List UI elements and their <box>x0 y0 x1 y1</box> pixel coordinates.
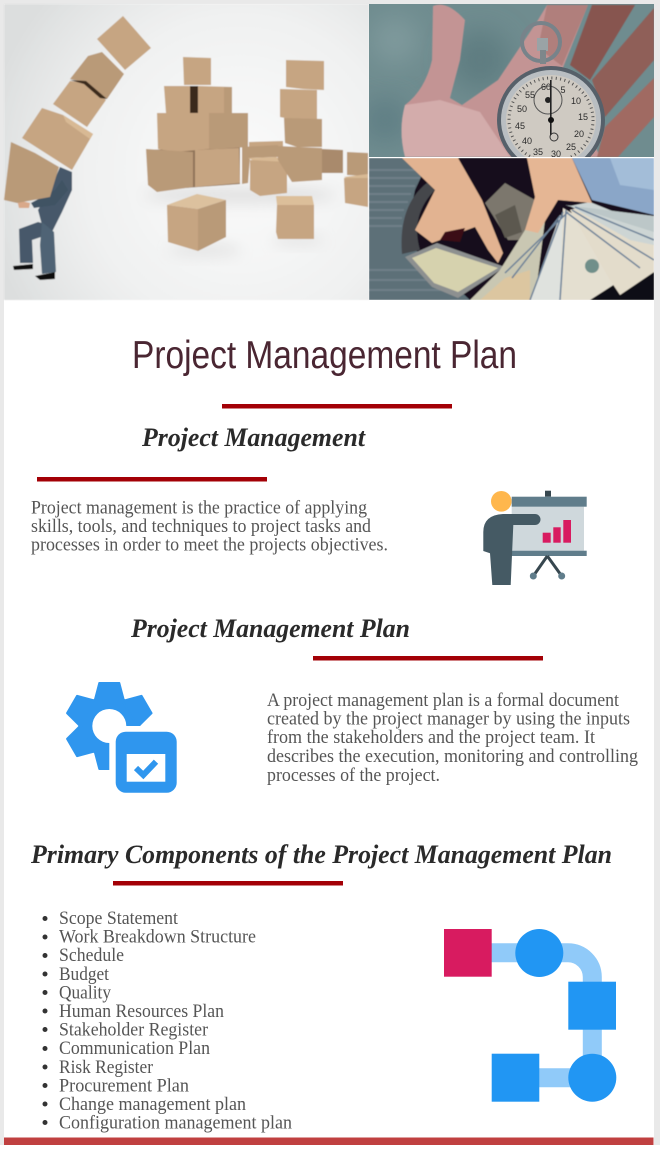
bulleted list of components: Stakeholder Register <box>59 1021 208 1041</box>
denim right <box>572 158 654 215</box>
icon: gear with calendar check <box>65 683 181 800</box>
stopwatch: 45 <box>515 121 525 131</box>
icon: process flow diagram <box>444 929 616 1102</box>
bulleted list of components: Scope Statement <box>59 909 179 929</box>
stopwatch: 60 <box>541 82 551 92</box>
stopwatch: 5 <box>560 85 566 95</box>
bulleted list of components: Human Resources Plan <box>59 1002 224 1022</box>
hands <box>402 158 503 263</box>
bills <box>485 183 535 240</box>
denim left <box>369 158 470 300</box>
bulleted list of components: Communication Plan <box>59 1039 210 1059</box>
photo: man carrying boxes and stacked boxes <box>4 4 369 300</box>
bulleted list of components: Budget <box>59 965 110 985</box>
stopwatch: 55 <box>525 90 535 100</box>
text block: project management plan definition: created by the project manager by using the inputs <box>267 710 630 730</box>
stopwatch: 15 <box>578 112 588 122</box>
photo: stopwatch on open hand <box>369 4 654 157</box>
stopwatch: 40 <box>522 136 532 146</box>
text block: project management definition: Project management is the practice of applying <box>31 498 367 518</box>
bulleted list of components <box>42 909 292 1134</box>
palm and thumb <box>402 5 600 157</box>
bulleted list of components: Change management plan <box>59 1095 246 1115</box>
footer bar <box>4 1138 654 1145</box>
heading: Project Management Plan: Project Management Plan <box>130 614 410 643</box>
text block: project management plan definition: A project management plan is a formal document <box>267 691 620 711</box>
heading: Project Management: Project Management <box>141 423 366 452</box>
text block: project management definition: processes in order to meet the projects objectives. <box>31 536 388 556</box>
title: Project Management Plan <box>132 334 517 377</box>
stopwatch: 10 <box>571 96 581 106</box>
icon: presenter with chart board <box>483 491 587 585</box>
stopwatch: 35 <box>533 147 543 157</box>
text block: project management definition <box>31 498 388 556</box>
falling box stack <box>4 16 151 203</box>
pyramid of boxes <box>146 57 287 196</box>
text block: project management definition: skills, tools, and techniques to project tasks and <box>31 517 372 537</box>
text block: project management plan definition <box>267 691 638 786</box>
stopwatch: 20 <box>574 129 584 139</box>
bulleted list of components: Risk Register <box>59 1058 153 1078</box>
photo: hands fanning dollar bills <box>369 158 654 300</box>
stopwatch: 30 <box>551 149 561 159</box>
stopwatch: 50 <box>517 104 527 114</box>
heading: Primary Components: Primary Components of the Project Management Plan <box>30 840 612 869</box>
text block: project management plan definition: describes the execution, monitoring and controlling <box>267 747 638 767</box>
right tower of boxes <box>277 60 368 207</box>
bulleted list of components: Quality <box>59 983 112 1003</box>
bulleted list of components: Configuration management plan <box>59 1114 292 1134</box>
stopwatch <box>497 23 605 174</box>
stopwatch: 25 <box>566 142 576 152</box>
bulleted list of components: Work Breakdown Structure <box>59 928 256 948</box>
text block: project management plan definition: processes of the project. <box>267 766 440 786</box>
bulleted list of components: Schedule <box>59 946 124 966</box>
bulleted list of components: Procurement Plan <box>59 1076 189 1096</box>
foreground boxes <box>167 194 314 251</box>
man in suit <box>13 167 72 280</box>
fingers <box>538 5 588 66</box>
text block: project management plan definition: from the stakeholders and the project team. It <box>267 728 596 748</box>
